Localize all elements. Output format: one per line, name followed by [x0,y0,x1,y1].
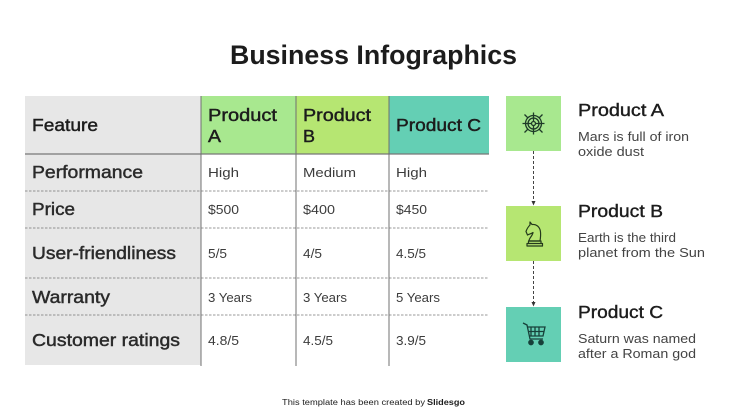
row: Performance: Medium [303,165,356,180]
row: Customer ratings: 4.5/5 [303,333,333,348]
square: Product A [506,96,561,151]
row: Warranty: 5 Years [396,290,441,305]
icon: shopping cart [523,323,545,345]
row: Performance [32,162,427,182]
text: Product C: Product C [578,302,663,322]
row: Warranty: 3 Years [303,290,348,305]
text: Product C: Saturn was named [578,331,696,346]
row: User-friendliness: 4/5 [303,246,322,261]
footer credit: Slidesgo [427,398,465,407]
text: Product C: after a Roman god [578,346,696,361]
icon: chess knight [526,222,542,246]
row: Warranty: 3 Years [208,290,253,305]
header: Product A [201,96,296,154]
text: Product A: oxide dust [578,144,644,159]
header: Product B [296,96,389,154]
footer credit: This template has been created by [282,398,425,407]
header: Product B: B [303,126,315,146]
row: Warranty [32,287,441,307]
row: Price: $450 [396,202,427,217]
row: User-friendliness: 4.5/5 [396,246,426,261]
row: Customer ratings [32,330,426,350]
feature column background [25,96,201,365]
row: Customer ratings: 3.9/5 [396,333,426,348]
row: Warranty: Warranty [32,287,110,307]
arrow: A to B [532,151,536,206]
icon: ship wheel [522,112,544,134]
row: Price [32,199,427,219]
row: Performance: High [208,165,239,180]
text: Product B [578,201,705,260]
footer credit [282,398,465,407]
row: Price: $400 [303,202,335,217]
header: Feature: Feature [32,115,98,135]
text: Product A: Product A [578,100,664,120]
text: Product B: Earth is the third [578,230,676,245]
row: Customer ratings: 4.8/5 [208,333,239,348]
header: Product A: A [208,126,221,146]
row: Price: Price [32,199,75,219]
text: Product A: Mars is full of iron [578,129,689,144]
row: Price: $500 [208,202,239,217]
header: Product C: Product C [396,115,481,135]
arrow: B to C [532,261,536,306]
row: Customer ratings: Customer ratings [32,330,180,350]
text: Product B: Product B [578,201,663,221]
header: Product C [389,96,489,154]
square: Product B [506,206,561,261]
header: Product A: Product [208,105,277,125]
square: Product C [506,307,561,362]
header: Product B: Product [303,105,371,125]
title: Business Infographics [230,40,517,70]
row: Performance: High [396,165,427,180]
row: User-friendliness: User-friendliness [32,243,176,263]
row: User-friendliness: 5/5 [208,246,227,261]
text: Product A [578,100,689,159]
comparison table [25,96,489,366]
text: Product B: planet from the Sun [578,245,705,260]
text: Product C [578,302,696,361]
row: User-friendliness [32,243,426,263]
row: Performance: Performance [32,162,143,182]
